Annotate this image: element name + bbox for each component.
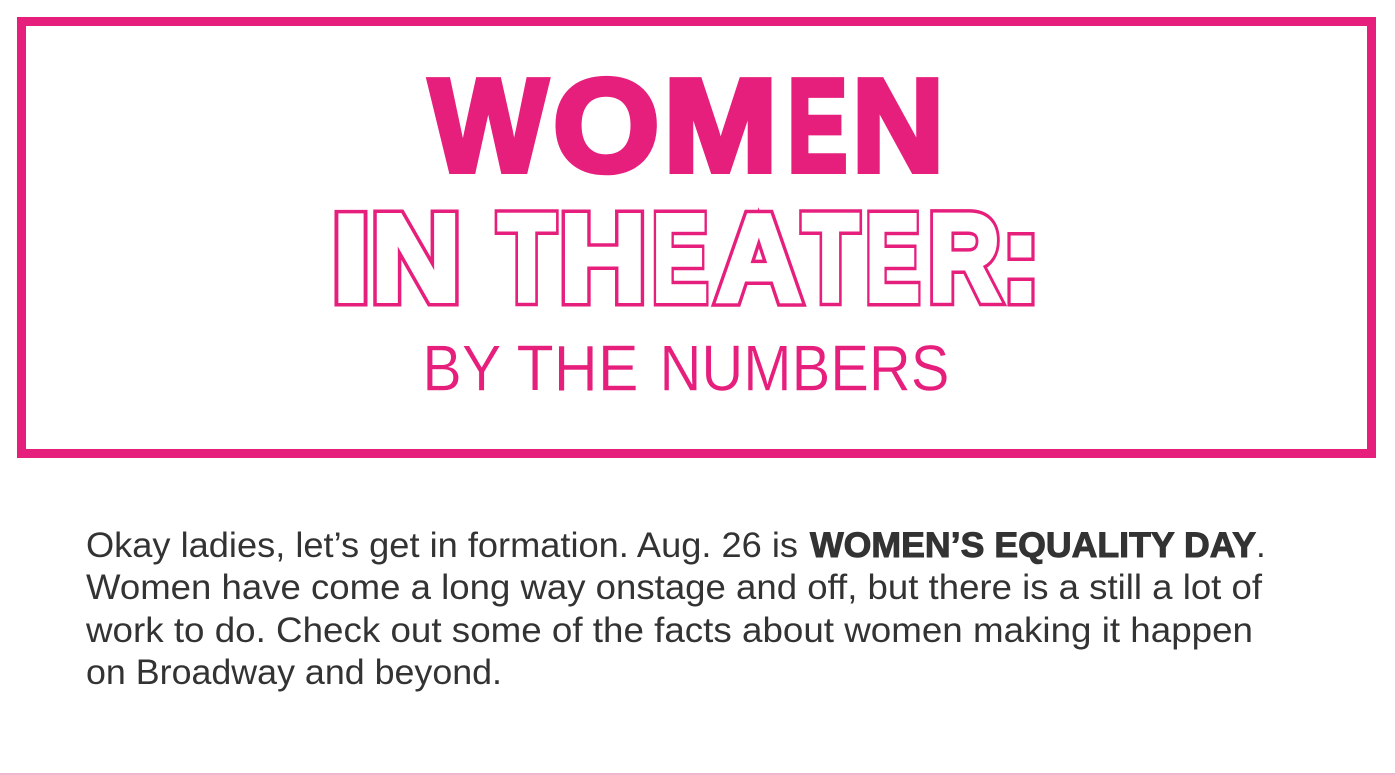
intro text block: Women have come a long way onstage and off, but there is a still a lot of (86, 568, 1262, 607)
heading: by the numbers: THE (516, 332, 638, 404)
intro text block: on Broadway and beyond. (86, 653, 502, 692)
heading: in theater: E (652, 190, 708, 328)
heading: in theater: R (928, 190, 1000, 328)
intro text block: . (1256, 526, 1266, 565)
heading: women: E (787, 52, 847, 199)
heading: women: W (429, 52, 548, 199)
heading: in theater: T (498, 190, 555, 328)
intro text block: work to do. Check out some of the facts about women making it happen (85, 611, 1253, 650)
bottom rule (0, 773, 1395, 775)
heading: in theater: I (332, 190, 370, 328)
heading: in theater: T (498, 190, 555, 328)
heading: in theater (332, 190, 1040, 328)
heading: in theater: H (559, 190, 646, 328)
heading: in theater: A (716, 190, 802, 328)
heading: women: O (553, 52, 660, 199)
heading: by the numbers: NUMBERS (660, 332, 950, 404)
heading: in theater: A (716, 190, 802, 328)
intro text block (85, 526, 1266, 692)
heading: in theater: : (1002, 190, 1040, 328)
heading: in theater: : (1002, 190, 1040, 328)
heading: women: M (664, 52, 778, 199)
heading: in theater: T (803, 190, 859, 328)
heading: in theater: N (371, 190, 461, 328)
heading: in theater: R (928, 190, 1000, 328)
heading: in theater: E (866, 190, 920, 328)
intro text block: Okay ladies, let’s get in formation. Aug. 26 is (86, 526, 798, 565)
heading: in theater: E (652, 190, 708, 328)
panel border (22, 22, 1372, 454)
heading: women: N (852, 52, 944, 199)
heading: in theater: N (371, 190, 461, 328)
intro text block: WOMEN’S EQUALITY DAY (810, 526, 1256, 565)
heading: in theater: I (332, 190, 370, 328)
heading: in theater: T (803, 190, 859, 328)
heading: by the numbers: BY (422, 332, 500, 404)
heading: in theater: E (866, 190, 920, 328)
heading: in theater: H (559, 190, 646, 328)
